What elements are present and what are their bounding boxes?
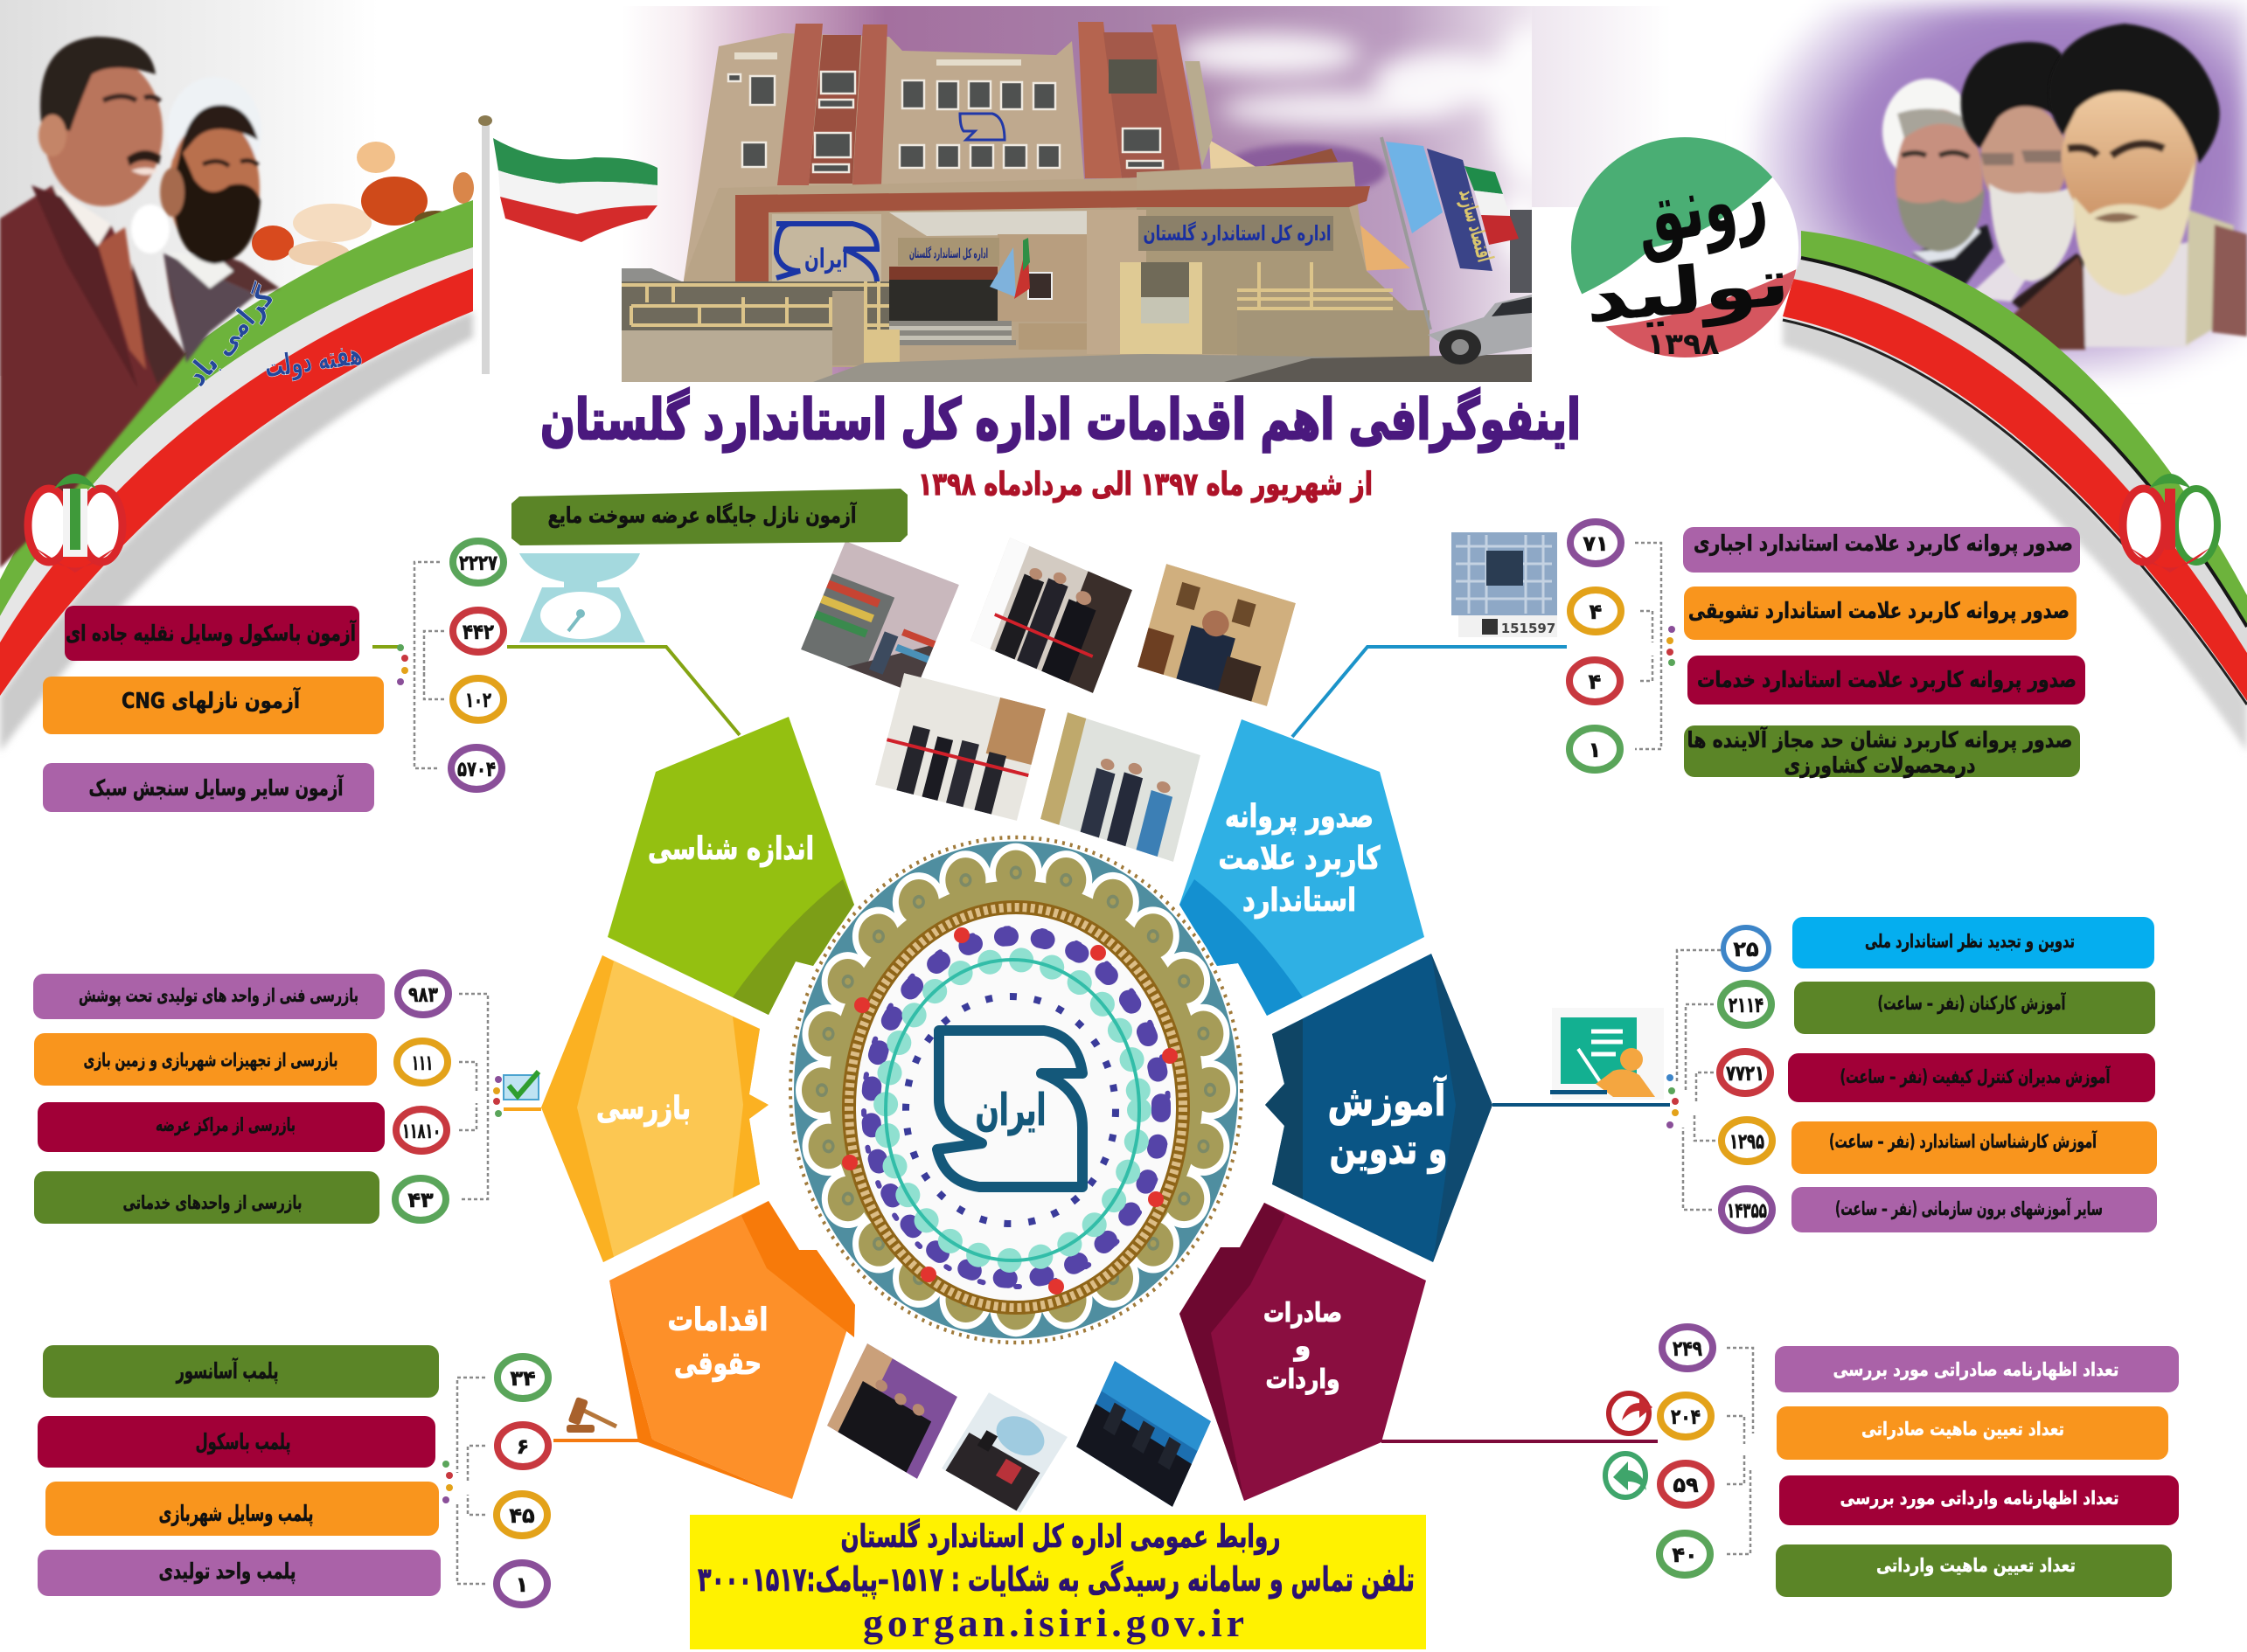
- pill: cng: [43, 677, 384, 734]
- segment: training: و تدوین: [1329, 1125, 1448, 1174]
- panel: training list: [1550, 917, 2157, 1232]
- pill: voluntary: [1684, 587, 2077, 640]
- seal: ronagh tolid: رونق: [1627, 147, 1773, 266]
- connector lines to segments: [372, 647, 1670, 1441]
- badge 40: [1659, 1533, 1710, 1575]
- portrait: man with beard: [160, 77, 280, 363]
- sky and building photo: اداره کل استاندارد گلستان: [909, 246, 988, 261]
- sky and building photo: اداره کل استاندارد گلستان: [1144, 221, 1331, 246]
- badge 442: ۴۴۲: [463, 620, 494, 644]
- center logo: [937, 1031, 1082, 1187]
- badge 43: [395, 1178, 446, 1220]
- pill: playground seal: پلمب وسایل شهربازی: [159, 1501, 313, 1527]
- segment: license: استاندارد: [1242, 883, 1356, 919]
- building upper floors: [684, 33, 1084, 280]
- flowers: [252, 142, 474, 266]
- panel: measurement list: [43, 489, 908, 812]
- icon: teacher at board: [1550, 1008, 1664, 1100]
- segment: inspection: بازرسی: [596, 1091, 691, 1127]
- panel: inspection list: [33, 973, 539, 1224]
- portrait: man in suit: [0, 37, 186, 568]
- central mandala: [787, 834, 1245, 1346]
- pill: standards: [1792, 917, 2154, 968]
- badge 1295: [1722, 1120, 1772, 1162]
- badge 4: ۴: [1590, 600, 1602, 624]
- segment: training: [1265, 954, 1492, 1262]
- purple ring: [871, 936, 1161, 1279]
- segment: import export: واردات: [1266, 1364, 1339, 1395]
- badge 7721: [1720, 1052, 1770, 1093]
- badge 5704: [451, 747, 502, 789]
- segment: import export: صادرات: [1263, 1298, 1342, 1329]
- badge 11810: ۱۱۸۱۰: [402, 1119, 441, 1143]
- pill: export nature: [1777, 1406, 2168, 1460]
- dotted connectors: [1727, 1348, 1753, 1554]
- top strips: [734, 52, 1021, 66]
- badge 4 services: ۴: [1589, 670, 1601, 694]
- badge 25: [1723, 927, 1769, 969]
- segment: license: صدور پروانه: [1225, 799, 1374, 835]
- badge 6: ۶: [517, 1434, 529, 1459]
- sign: [1138, 216, 1333, 251]
- photo: office interview: [1137, 564, 1296, 706]
- badge 204: [1660, 1395, 1711, 1437]
- pill: playgrounds: بازرسی از تجهیزات شهربازی و زمین بازی: [84, 1050, 337, 1071]
- dotted connectors: [1635, 543, 1661, 749]
- title: اینفوگرافی اهم اقدامات اداره کل استاندارد گلستان: [540, 387, 1581, 453]
- segment: import export: [1179, 1203, 1426, 1501]
- badge 6: [497, 1425, 548, 1467]
- photo: ribbon cutting: [970, 538, 1132, 693]
- right flag band: [1783, 231, 2247, 752]
- photo: ceremony three: [1076, 1361, 1211, 1507]
- panel: import export list: [1605, 1327, 2179, 1597]
- pill: nozzle test: آزمون نازل جایگاه عرضه سوخت مایع: [547, 502, 858, 529]
- badge 45: [497, 1494, 547, 1536]
- badge 204: ۲۰۴: [1671, 1405, 1701, 1429]
- pill: export nature: تعداد تعیین ماهیت صادراتی: [1861, 1419, 2064, 1440]
- pill: factories: [33, 974, 385, 1019]
- badge 111: ۱۱۱: [412, 1051, 433, 1075]
- badge 45: ۴۵: [509, 1503, 535, 1528]
- contact box: gorgan.isiri.gov.ir: [863, 1600, 1244, 1645]
- contact box: [690, 1515, 1426, 1649]
- emblem: right: [2123, 474, 2217, 573]
- segment: training: آموزش: [1327, 1075, 1447, 1126]
- clouds: [1176, 26, 1569, 262]
- badge 983: [398, 973, 449, 1015]
- pill: supply centres: بازرسی از مراکز عرضه: [156, 1114, 296, 1135]
- pill: weighbridge: [65, 606, 359, 661]
- pill: services: بازرسی از واحدهای خدماتی: [122, 1192, 303, 1213]
- pill: weighbridge seal: پلمب باسکول: [196, 1429, 290, 1455]
- segment: legal: اقدامات: [668, 1302, 768, 1338]
- pill: other: سایر آموزشهای برون سازمانی (نفر – ساعت): [1835, 1197, 2103, 1219]
- pill: services: [34, 1171, 379, 1224]
- badge 249: ۲۴۹: [1673, 1336, 1702, 1361]
- icon: green import arrow: [1605, 1454, 1646, 1497]
- segment: measurement: اندازه شناسی: [648, 831, 814, 867]
- badge 4: [1570, 590, 1621, 632]
- portrait: rouhani: [1882, 79, 1993, 286]
- pill: pollutants: صدور پروانه کاربرد نشان حد مجاز آلاینده ها: [1687, 726, 2072, 753]
- badge 71: ۷۱: [1583, 531, 1609, 556]
- pill: elevator: پلمب آسانسور: [175, 1357, 278, 1385]
- badge 25: ۲۵: [1733, 937, 1759, 961]
- pill: staff: [1794, 982, 2155, 1034]
- banners: [1381, 137, 1430, 330]
- photo: store: [801, 541, 959, 693]
- badge 7721: ۷۷۲۱: [1726, 1061, 1764, 1086]
- pill: experts: [1791, 1121, 2157, 1174]
- portrait: khomeini: [2011, 24, 2247, 350]
- pill: weighbridge seal: [38, 1416, 435, 1468]
- sky and building photo: اقتصاد سازند: [1453, 186, 1498, 265]
- ground floor: [684, 162, 1428, 367]
- portrait: khamenei: [1961, 42, 2090, 323]
- emblem: left: [28, 474, 122, 573]
- pill: production seal: [38, 1550, 441, 1596]
- icon: hologram: [1451, 532, 1557, 637]
- badge 5704: ۵۷۰۴: [457, 757, 496, 781]
- center logo: ایران: [976, 1085, 1046, 1136]
- pill: export declarations: [1775, 1346, 2179, 1392]
- ground: [813, 354, 1532, 382]
- badge 59: [1660, 1463, 1711, 1505]
- pill: staff: آموزش کارکنان (نفر – ساعت): [1878, 992, 2066, 1014]
- pill: supply centres: [38, 1102, 385, 1152]
- far hills: [1209, 142, 1256, 169]
- pill: services: صدور پروانه کاربرد علامت استاندارد خدمات: [1697, 667, 2077, 693]
- icon: gavel: [567, 1397, 616, 1433]
- pill: quality managers: [1788, 1053, 2155, 1102]
- pill: nozzle test: [511, 489, 908, 545]
- segment: import export: و: [1293, 1331, 1311, 1362]
- pill: pollutants: [1684, 725, 2080, 779]
- badge 34: [497, 1357, 548, 1399]
- badge 2114: ۲۱۱۴: [1729, 993, 1764, 1017]
- pill: playground seal: [45, 1482, 439, 1536]
- pill: production seal: پلمب واحد تولیدی: [159, 1558, 296, 1585]
- icon: red export arrow: [1609, 1393, 1652, 1433]
- pill: light measuring: آزمون سایر وسایل سنجش سبک: [89, 774, 344, 802]
- rope ring: [849, 907, 1183, 1308]
- icon: hologram: 151597: [1501, 621, 1555, 636]
- photo: outdoor ribbon: [875, 673, 1046, 821]
- icon: checkmark: [504, 1072, 539, 1100]
- badge 2227: [453, 541, 504, 583]
- pill: quality managers: آموزش مدیران کنترل کیفیت (نفر – ساعت): [1840, 1065, 2111, 1087]
- entrance flags: [990, 247, 1016, 297]
- badge 1: [1569, 728, 1620, 770]
- photo: ceremony one: [827, 1343, 957, 1479]
- badge 59: ۵۹: [1673, 1473, 1699, 1497]
- teal ring: [886, 960, 1139, 1260]
- badge 102: [453, 678, 504, 720]
- badge 1295: ۱۲۹۵: [1729, 1129, 1764, 1154]
- pill: standards: تدوین و تجدید نظر استاندارد ملی: [1865, 931, 2075, 952]
- badge 442: [453, 610, 504, 652]
- segment: license: [1179, 719, 1424, 1016]
- iran flag on pole: [478, 115, 657, 374]
- pill: mandatory: صدور پروانه کاربرد علامت استاندارد اجباری: [1694, 531, 2073, 557]
- badge 1: [497, 1563, 547, 1605]
- photo: ceremony two: [942, 1392, 1068, 1513]
- neighbouring roof: [622, 268, 684, 282]
- badge 14355: [1722, 1189, 1772, 1231]
- pill: import nature: [1776, 1544, 2172, 1597]
- car: [1428, 295, 1532, 358]
- badge 102: ۱۰۲: [465, 688, 491, 712]
- badge 1: ۱: [1589, 738, 1601, 762]
- top-left banner: [0, 0, 474, 752]
- pill: mandatory: [1683, 527, 2080, 573]
- pill: factories: بازرسی فنی از واحد های تولیدی تحت پوشش: [79, 985, 358, 1006]
- badge 1: ۱: [516, 1572, 528, 1597]
- pill: export declarations: تعداد اظهارنامه صادراتی مورد بررسی: [1833, 1359, 2119, 1380]
- photo: group of men: [1040, 712, 1200, 862]
- badge 2114: [1721, 983, 1771, 1025]
- sky and building photo: [622, 6, 1672, 382]
- dotted connectors: [459, 994, 488, 1199]
- pill: playgrounds: [34, 1033, 377, 1086]
- contact box: تلفن تماس و سامانه رسیدگی به شکایات : ۱۵۱۷–پیامک:۳۰۰۰۱۵۱۷: [698, 1560, 1415, 1600]
- panel: legal list: [38, 1345, 616, 1605]
- segment: measurement: [608, 717, 854, 1015]
- dotted connectors: [457, 1378, 485, 1584]
- panel: license list: [1451, 522, 2085, 779]
- pill: voluntary: صدور پروانه کاربرد علامت استاندارد تشویقی: [1688, 598, 2070, 624]
- navy ring: [906, 996, 1116, 1224]
- badge 111: [397, 1041, 448, 1083]
- pill: pollutants: درمحصولات کشاورزی: [1784, 753, 1976, 779]
- greeting text: هفته دولت: [262, 337, 365, 385]
- badge 4 services: [1569, 660, 1620, 702]
- segment: legal: حقوقی: [674, 1346, 762, 1382]
- left flag band: [0, 200, 473, 752]
- greeting text: [179, 280, 365, 392]
- greeting text: گرامی باد: [179, 280, 282, 392]
- pill: cng: آزمون نازلهای CNG: [122, 687, 301, 714]
- dotted connectors: [1677, 950, 1721, 1210]
- badge 40: ۴۰: [1672, 1543, 1698, 1567]
- windows: [728, 72, 1163, 172]
- badge 43: ۴۳: [407, 1188, 434, 1212]
- segment: license: کاربرد علامت: [1219, 841, 1381, 877]
- pill: import nature: تعداد تعیین ماهیت وارداتی: [1876, 1555, 2076, 1576]
- sky and building photo: ایران: [804, 244, 848, 274]
- dotted connectors: [414, 562, 444, 768]
- pill: services: [1687, 656, 2085, 705]
- pill: light measuring: [43, 763, 374, 812]
- subtitle: از شهریور ماه ۱۳۹۷ الی مردادماه ۱۳۹۸: [918, 467, 1373, 503]
- red flowers: [842, 927, 1178, 1295]
- badge 2227: ۲۲۲۷: [459, 551, 497, 575]
- seal: ronagh tolid: ۱۳۹۸: [1646, 327, 1720, 362]
- pill: experts: آموزش کارشناسان استاندارد (نفر – ساعت): [1829, 1130, 2097, 1152]
- segment: inspection: [541, 955, 769, 1262]
- segment: legal: [609, 1201, 855, 1499]
- contact box: روابط عمومی اداره کل استاندارد گلستان: [841, 1518, 1280, 1555]
- badge 249: [1662, 1327, 1713, 1369]
- badge 14355: ۱۴۳۵۵: [1727, 1198, 1767, 1223]
- seal: ronagh tolid: [1571, 137, 1798, 357]
- seal: ronagh tolid: تولید: [1582, 245, 1793, 338]
- pill: weighbridge: آزمون باسکول وسایل نقلیه جاده ای: [66, 620, 357, 647]
- badge 71: [1570, 522, 1621, 564]
- badge 11810: [396, 1109, 447, 1151]
- icon: weighing scale: [519, 553, 645, 642]
- badge 34: ۳۴: [510, 1366, 536, 1391]
- pill: elevator: [43, 1345, 439, 1398]
- pill: import declarations: تعداد اظهارنامه وارداتی مورد بررسی: [1840, 1488, 2119, 1509]
- pill: other: [1791, 1187, 2157, 1232]
- pill: import declarations: [1779, 1475, 2179, 1525]
- fences: [622, 281, 889, 330]
- top-right portraits background: [1749, 4, 2247, 752]
- badge 983: ۹۸۳: [408, 982, 438, 1007]
